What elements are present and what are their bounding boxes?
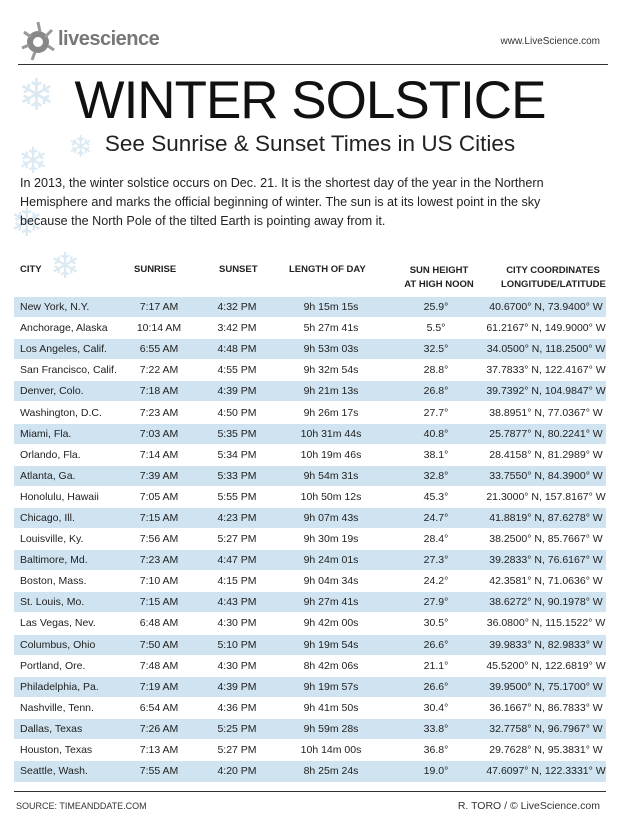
data table: New York, N.Y.: [20, 301, 89, 313]
data table: 9h 26m 17s: [304, 407, 358, 419]
data table: 5:10 PM: [217, 639, 257, 651]
data table: 9h 04m 34s: [304, 575, 358, 587]
data table: 39.7392° N, 104.9847° W: [486, 385, 606, 397]
data table: 32.8°: [424, 470, 448, 482]
data table: 26.6°: [424, 639, 448, 651]
data table: 7:56 AM: [140, 533, 178, 545]
data table: 4:20 PM: [217, 765, 257, 777]
data table: 33.7550° N, 84.3900° W: [489, 470, 603, 482]
data table: 7:26 AM: [140, 723, 178, 735]
table header: LENGTH OF DAY: [289, 264, 366, 275]
data table: 7:50 AM: [140, 639, 178, 651]
data table: 4:39 PM: [217, 385, 257, 397]
data table: 10h 14m 00s: [301, 744, 361, 756]
data table: 38.8951° N, 77.0367° W: [489, 407, 603, 419]
data table: 28.4158° N, 81.2989° W: [489, 449, 603, 461]
decorative snowflakes: ❄: [18, 71, 55, 120]
data table: 24.7°: [424, 512, 448, 524]
data table: 33.8°: [424, 723, 448, 735]
data table: [14, 297, 606, 782]
source: SOURCE: TIMEANDDATE.COM: [16, 801, 147, 811]
data table: Anchorage, Alaska: [20, 322, 108, 334]
data table: 4:39 PM: [217, 681, 257, 693]
data table: 4:30 PM: [217, 617, 257, 629]
data table: 28.8°: [424, 364, 448, 376]
data table: Honolulu, Hawaii: [20, 491, 99, 503]
data table: Baltimore, Md.: [20, 554, 88, 566]
data table: 10h 50m 12s: [301, 491, 361, 503]
data table: 25.9°: [424, 301, 448, 313]
data table: 7:03 AM: [140, 428, 178, 440]
data table: Atlanta, Ga.: [20, 470, 75, 482]
data table: 9h 15m 15s: [304, 301, 358, 313]
credit: R. TORO / © LiveScience.com: [458, 800, 600, 812]
data table: 40.8°: [424, 428, 448, 440]
data table: 26.6°: [424, 681, 448, 693]
data table: 7:15 AM: [140, 596, 178, 608]
data table: 5:35 PM: [217, 428, 257, 440]
data table: Louisville, Ky.: [20, 533, 83, 545]
data table: Las Vegas, Nev.: [20, 617, 96, 629]
data table: Boston, Mass.: [20, 575, 87, 587]
data table: 8h 25m 24s: [304, 765, 358, 777]
data table: 4:43 PM: [217, 596, 257, 608]
data table: 38.1°: [424, 449, 448, 461]
data table: 40.6700° N, 73.9400° W: [489, 301, 603, 313]
data table: Dallas, Texas: [20, 723, 82, 735]
data table: 9h 53m 03s: [304, 343, 358, 355]
data table: 9h 59m 28s: [304, 723, 358, 735]
table header: SUN HEIGHT AT HIGH NOON: [404, 265, 474, 290]
data table: Philadelphia, Pa.: [20, 681, 99, 693]
data table: 4:36 PM: [217, 702, 257, 714]
data table: 21.1°: [424, 660, 448, 672]
data table: 25.7877° N, 80.2241° W: [489, 428, 603, 440]
data table: 38.6272° N, 90.1978° W: [489, 596, 603, 608]
data table: 7:55 AM: [140, 765, 178, 777]
data table: 32.5°: [424, 343, 448, 355]
data table: Seattle, Wash.: [20, 765, 88, 777]
data table: Orlando, Fla.: [20, 449, 81, 461]
data table: 8h 42m 06s: [304, 660, 358, 672]
data table: 37.7833° N, 122.4167° W: [486, 364, 606, 376]
intro paragraph: In 2013, the winter solstice occurs on Dec. 21. It is the shortest day of the year in the Northern Hemisphere and marks the official beginning of winter. The sun is at its lowest point in the sky because the North Pole of the tilted Earth is pointing away from it.: [20, 176, 544, 228]
table header: CITY COORDINATES LONGITUDE/LATITUDE: [501, 265, 606, 290]
data table: Columbus, Ohio: [20, 639, 95, 651]
data table: Houston, Texas: [20, 744, 92, 756]
data table: 7:05 AM: [140, 491, 178, 503]
data table: 27.9°: [424, 596, 448, 608]
data table: 27.7°: [424, 407, 448, 419]
data table: 32.7758° N, 96.7967° W: [489, 723, 603, 735]
table header: SUNSET: [219, 264, 258, 275]
data table: 9h 54m 31s: [304, 470, 358, 482]
data table: 30.5°: [424, 617, 448, 629]
data table: 5:27 PM: [217, 744, 257, 756]
data table: 10:14 AM: [137, 322, 181, 334]
data table: 5:27 PM: [217, 533, 257, 545]
data table: 7:22 AM: [140, 364, 178, 376]
data table: 4:32 PM: [217, 301, 257, 313]
data table: 5.5°: [427, 322, 445, 334]
data table: 7:19 AM: [140, 681, 178, 693]
data table: 7:10 AM: [140, 575, 178, 587]
data table: 21.3000° N, 157.8167° W: [486, 491, 606, 503]
data table: 4:50 PM: [217, 407, 257, 419]
data table: Los Angeles, Calif.: [20, 343, 107, 355]
data table: 4:23 PM: [217, 512, 257, 524]
data table: 30.4°: [424, 702, 448, 714]
data table: 29.7628° N, 95.3831° W: [489, 744, 603, 756]
data table: 41.8819° N, 87.6278° W: [489, 512, 603, 524]
data table: 7:17 AM: [140, 301, 178, 313]
data table: 3:42 PM: [217, 322, 257, 334]
data table: St. Louis, Mo.: [20, 596, 84, 608]
data table: 5:33 PM: [217, 470, 257, 482]
data table: Chicago, Ill.: [20, 512, 75, 524]
data table: 26.8°: [424, 385, 448, 397]
text: ❄: [10, 201, 44, 245]
data table: 9h 19m 57s: [304, 681, 358, 693]
data table: 9h 19m 54s: [304, 639, 358, 651]
logo: livescience: [58, 28, 159, 50]
data table: 45.3°: [424, 491, 448, 503]
data table: 10h 31m 44s: [301, 428, 361, 440]
data table: 24.2°: [424, 575, 448, 587]
data table: 39.9833° N, 82.9833° W: [489, 639, 603, 651]
data table: 4:48 PM: [217, 343, 257, 355]
data table: 9h 24m 01s: [304, 554, 358, 566]
data table: 4:15 PM: [217, 575, 257, 587]
data table: 9h 42m 00s: [304, 617, 358, 629]
data table: 5h 27m 41s: [304, 322, 358, 334]
data table: San Francisco, Calif.: [20, 364, 117, 376]
data table: 7:23 AM: [140, 554, 178, 566]
text: ❄: [50, 245, 80, 286]
data table: 36.1667° N, 86.7833° W: [489, 702, 603, 714]
subtitle: See Sunrise & Sunset Times in US Cities: [105, 131, 515, 156]
data table: 4:55 PM: [217, 364, 257, 376]
data table: 4:47 PM: [217, 554, 257, 566]
data table: Washington, D.C.: [20, 407, 102, 419]
data table: 39.9500° N, 75.1700° W: [489, 681, 603, 693]
data table: 36.8°: [424, 744, 448, 756]
data table: 6:54 AM: [140, 702, 178, 714]
data table: 28.4°: [424, 533, 448, 545]
data table: Nashville, Tenn.: [20, 702, 94, 714]
text: ❄: [68, 131, 93, 164]
data table: 7:13 AM: [140, 744, 178, 756]
data table: 7:15 AM: [140, 512, 178, 524]
data table: Miami, Fla.: [20, 428, 71, 440]
data table: 27.3°: [424, 554, 448, 566]
data table: 61.2167° N, 149.9000° W: [486, 322, 606, 334]
data table: 42.3581° N, 71.0636° W: [489, 575, 603, 587]
data table: 45.5200° N, 122.6819° W: [486, 660, 606, 672]
data table: 7:18 AM: [140, 385, 178, 397]
data table: Portland, Ore.: [20, 660, 85, 672]
data table: 6:55 AM: [140, 343, 178, 355]
data table: 9h 30m 19s: [304, 533, 358, 545]
website url: www.LiveScience.com: [501, 36, 600, 47]
data table: 9h 07m 43s: [304, 512, 358, 524]
data table: 38.2500° N, 85.7667° W: [489, 533, 603, 545]
data table: 6:48 AM: [140, 617, 178, 629]
logo: [22, 22, 160, 60]
data table: 7:48 AM: [140, 660, 178, 672]
data table: 10h 19m 46s: [301, 449, 361, 461]
data table: 9h 32m 54s: [304, 364, 358, 376]
data table: Denver, Colo.: [20, 385, 84, 397]
data table: 4:30 PM: [217, 660, 257, 672]
data table: 7:23 AM: [140, 407, 178, 419]
data table: 34.0500° N, 118.2500° W: [487, 343, 605, 355]
data table: 7:14 AM: [140, 449, 178, 461]
data table: 5:55 PM: [217, 491, 257, 503]
data table: 36.0800° N, 115.1522° W: [487, 617, 605, 629]
table header: SUNRISE: [134, 264, 176, 275]
text: ❄: [18, 140, 48, 181]
data table: 5:34 PM: [217, 449, 257, 461]
data table: 39.2833° N, 76.6167° W: [489, 554, 603, 566]
data table: 9h 41m 50s: [304, 702, 358, 714]
title: WINTER SOLSTICE: [75, 71, 545, 130]
data table: 5:25 PM: [217, 723, 257, 735]
data table: 7:39 AM: [140, 470, 178, 482]
data table: 9h 27m 41s: [304, 596, 358, 608]
data table: 47.6097° N, 122.3331° W: [486, 765, 606, 777]
data table: 9h 21m 13s: [304, 385, 358, 397]
table header: [20, 264, 606, 290]
data table: 19.0°: [424, 765, 448, 777]
table header: CITY: [20, 264, 42, 275]
